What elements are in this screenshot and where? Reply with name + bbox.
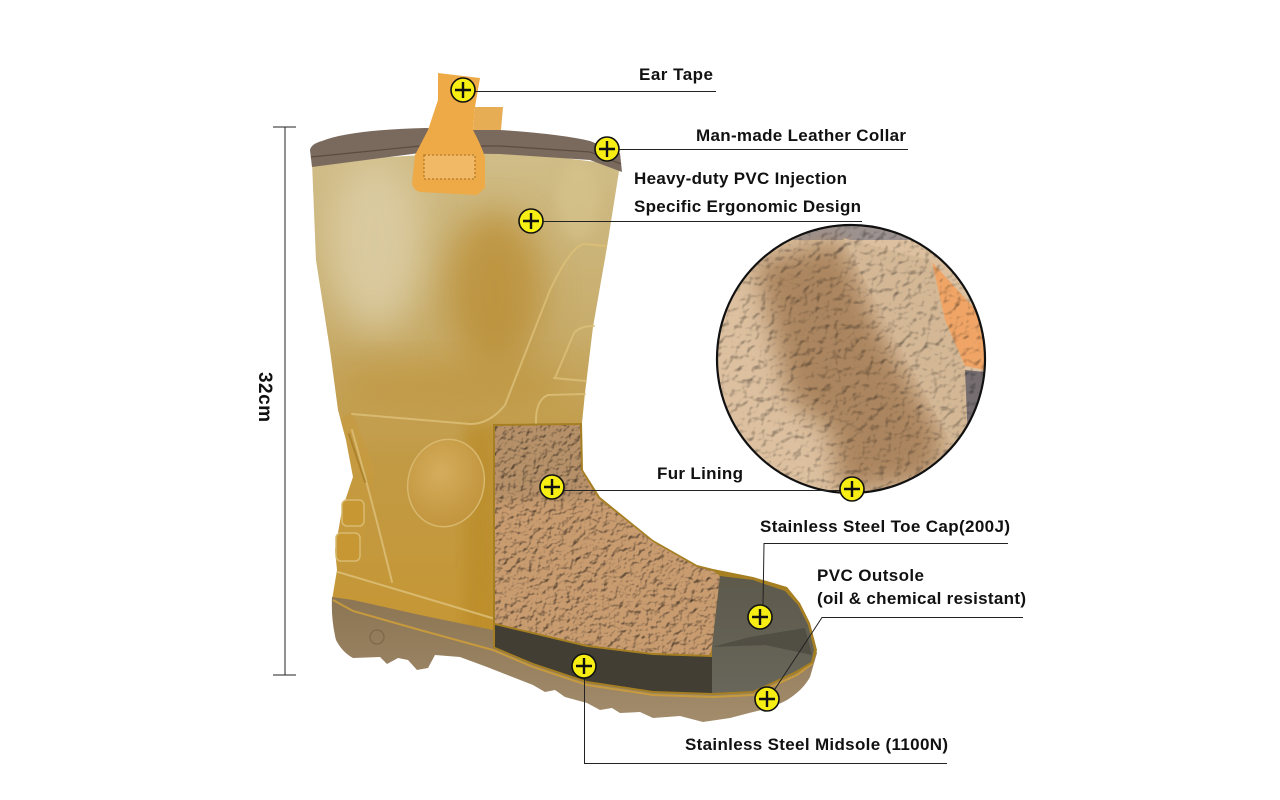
callout: collar: Man-made Leather Collar [696, 126, 906, 145]
lens: grey collar [792, 226, 910, 240]
marker: lens [840, 477, 864, 501]
dimension: 32cm: 32cm [254, 372, 275, 422]
marker: toe cap [748, 605, 772, 629]
leather collar [310, 128, 622, 172]
outsole [332, 597, 817, 722]
callout: PVC injection and design [543, 169, 862, 222]
callout: toe cap: Stainless Steel Toe Cap(200J) [760, 517, 1010, 536]
callout: ear tape: Ear Tape [639, 65, 713, 84]
lens: flap [843, 238, 967, 434]
callout: outsole: (oil & chemical resistant) [817, 589, 1026, 608]
outsole edge line [333, 600, 813, 697]
callout: outsole: PVC Outsole [817, 566, 924, 585]
callout: PVC injection and design: Specific Ergonomic Design [634, 197, 861, 216]
lens: dark lining [965, 370, 984, 424]
shaft moulded ridges [338, 244, 606, 618]
shaft shading [327, 160, 600, 650]
outsole logo [370, 630, 384, 644]
ear tape [412, 73, 485, 195]
marker: collar [595, 137, 619, 161]
marker: midsole [572, 654, 596, 678]
boot illustration [310, 73, 817, 722]
callout: midsole: Stainless Steel Midsole (1100N) [685, 735, 948, 754]
callout: midsole [584, 678, 948, 764]
boot shaft [312, 150, 620, 650]
lens: dark centre [755, 240, 945, 492]
marker: PVC [519, 209, 543, 233]
zoomed fur lining lens [715, 225, 987, 500]
lens: orange panel [932, 262, 985, 370]
marker: ear tape [451, 78, 475, 102]
callout: PVC injection and design: Heavy-duty PVC Injection [634, 169, 847, 188]
lens: base tones [715, 240, 987, 500]
toe cap highlight [712, 628, 812, 655]
stainless steel midsole section [495, 625, 712, 693]
callout: toe cap [760, 517, 1010, 605]
back pull loop [473, 107, 503, 130]
dimension: 32cm [254, 127, 296, 675]
toe cap [712, 576, 814, 693]
marker: outsole [755, 687, 779, 711]
ankle patch [398, 431, 494, 535]
callout: outsole [775, 566, 1026, 689]
marker: fur lining [540, 475, 564, 499]
heel lugs [336, 500, 364, 561]
callout: fur lining: Fur Lining [657, 464, 743, 483]
fur cutaway [490, 420, 817, 695]
